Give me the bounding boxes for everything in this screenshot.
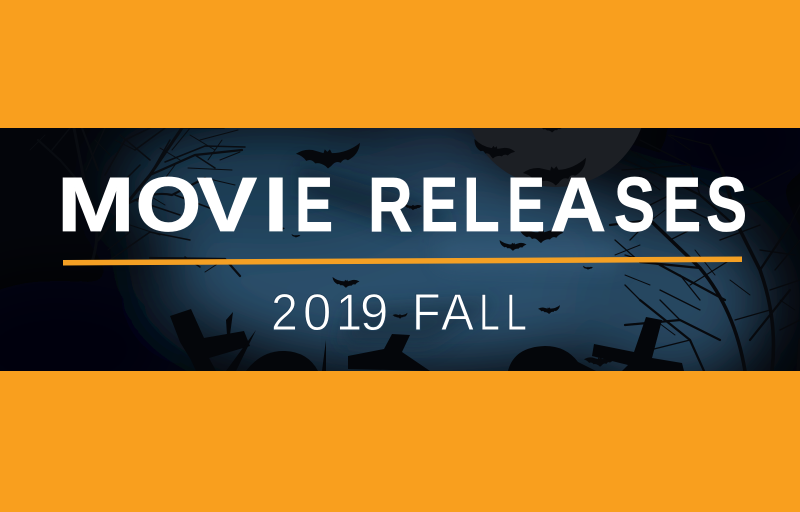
- title: [57, 161, 747, 248]
- left tree: [92, 128, 246, 278]
- subtitle: 9: [360, 283, 388, 341]
- title: I: [264, 162, 288, 248]
- subtitle: L: [506, 283, 527, 341]
- subtitle: A: [441, 283, 474, 341]
- title: L: [463, 161, 500, 248]
- title: E: [295, 163, 333, 248]
- subtitle: F: [412, 284, 441, 342]
- right tree: [608, 164, 794, 371]
- graves: [170, 309, 684, 371]
- subtitle: 1: [336, 284, 362, 342]
- infographic banner: [0, 128, 800, 371]
- title: E: [663, 163, 701, 248]
- night scene panel: [0, 128, 800, 371]
- subtitle: 2: [271, 283, 298, 341]
- moon: [471, 128, 641, 187]
- title: R: [368, 161, 412, 248]
- title: E: [507, 163, 545, 248]
- subtitle: L: [479, 283, 500, 341]
- orange divider line: [63, 256, 742, 266]
- subtitle: [271, 283, 527, 342]
- title: A: [550, 162, 606, 248]
- title: O: [136, 163, 201, 248]
- title: E: [420, 163, 458, 248]
- title: V: [197, 161, 257, 248]
- title: M: [57, 163, 135, 248]
- bats: [271, 122, 616, 367]
- title: S: [614, 161, 655, 248]
- subtitle: 0: [303, 283, 331, 341]
- title: S: [706, 161, 747, 248]
